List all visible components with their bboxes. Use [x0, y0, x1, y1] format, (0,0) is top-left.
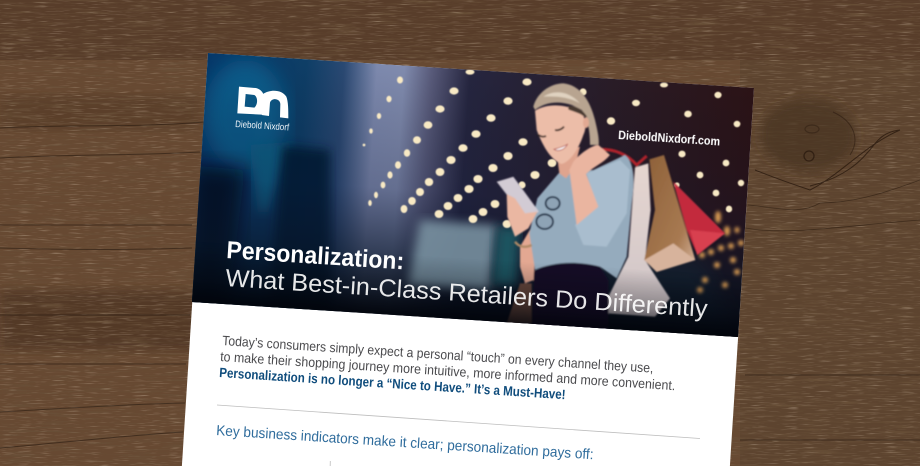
left arm — [520, 227, 535, 283]
woman with shopping bags — [497, 83, 725, 330]
neck — [557, 147, 580, 178]
intro text block — [219, 333, 676, 402]
hero photo panel — [180, 40, 770, 350]
intro line 3 bold: Personalization is no longer a “Nice to Have.” It’s a Must-Have! — [219, 365, 566, 402]
red strap — [602, 149, 647, 165]
phone hand — [507, 194, 537, 237]
logo: Diebold Nixdorf — [235, 87, 290, 133]
photo background — [192, 53, 754, 337]
small bag at hip — [507, 283, 532, 323]
wood knot — [745, 99, 920, 231]
face — [535, 105, 585, 164]
title — [225, 237, 709, 323]
brown bag — [644, 155, 695, 272]
logo mark — [237, 87, 288, 118]
skirt — [532, 263, 608, 330]
shirt — [529, 155, 634, 278]
phone — [497, 177, 539, 218]
title line 2: What Best-in-Class Retailers Do Differently — [225, 265, 709, 323]
glasses — [536, 197, 560, 229]
website url: DieboldNixdorf.com — [618, 128, 720, 149]
blurred store sign — [408, 220, 497, 290]
hair — [533, 83, 599, 145]
intro line 1: Today’s consumers simply expect a personal “touch” on every channel they use, — [222, 333, 654, 376]
head — [533, 83, 599, 164]
red bag — [673, 182, 725, 255]
paper sheet — [181, 53, 754, 466]
bottom shade of photo — [192, 262, 740, 337]
section heading: Key business indicators make it clear; personalization pays off: — [216, 423, 594, 463]
smile — [554, 144, 567, 151]
ceiling lights — [363, 69, 744, 228]
blurred background lights — [697, 211, 744, 293]
raised arm and hand — [569, 145, 610, 225]
intro line 2: to make their shopping journey more intuitive, more informed and more convenient. — [220, 349, 676, 393]
logo wordmark: Diebold Nixdorf — [235, 119, 290, 133]
title line 1: Personalization: — [226, 237, 405, 275]
watch — [515, 242, 532, 247]
eyes — [538, 127, 564, 137]
white bag — [607, 163, 670, 317]
